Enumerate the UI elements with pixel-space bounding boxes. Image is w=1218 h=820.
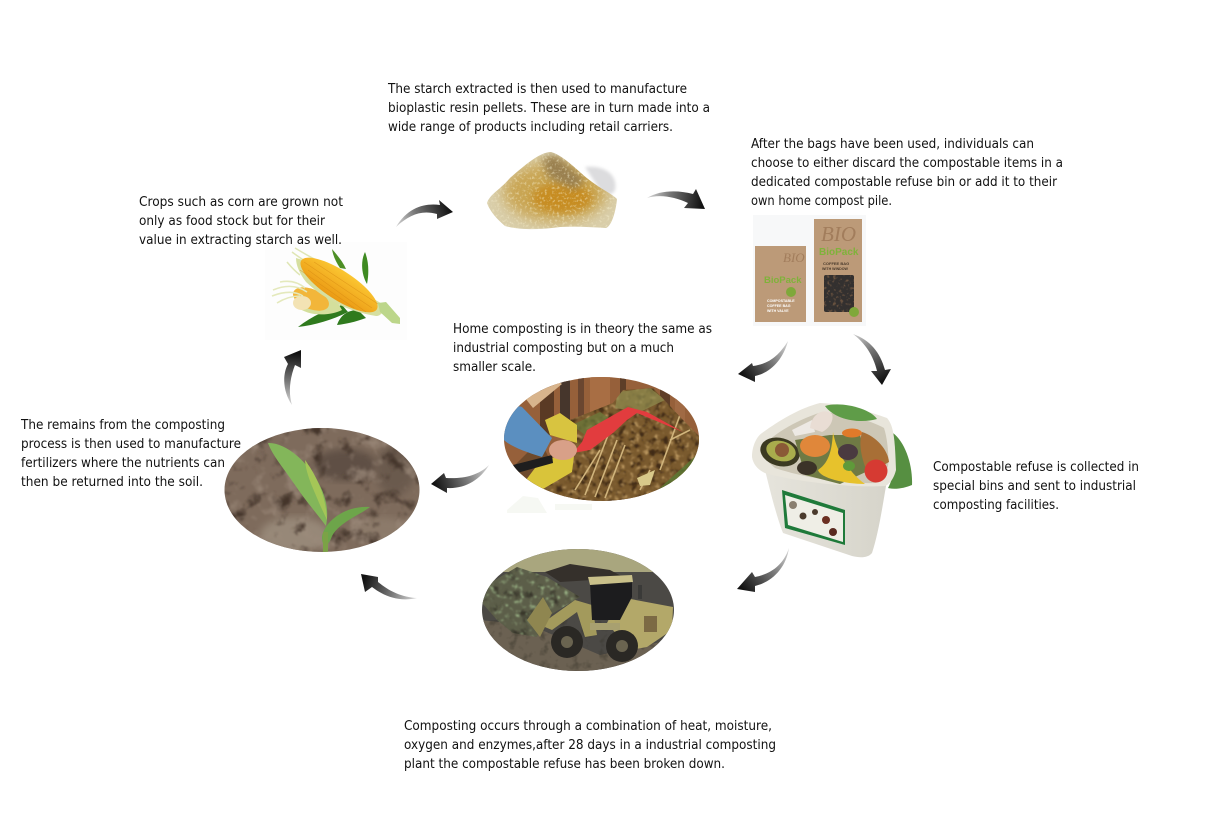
text: collection in bins: Compostable refuse is collected in xyxy=(933,460,1139,475)
arrow: corn to starch xyxy=(396,200,453,227)
text: after use of bags: own home compost pile. xyxy=(751,194,892,209)
image: compostable coffee bags xyxy=(753,215,866,326)
green top lid xyxy=(825,404,877,421)
text: collection in bins: special bins and sent to industrial xyxy=(933,479,1136,494)
bin body xyxy=(765,470,887,557)
text: fertilizers: then be returned into the soil. xyxy=(21,475,203,490)
green side lid xyxy=(888,433,912,489)
text: crops: only as food stock but for their xyxy=(139,214,326,229)
text: collection in bins: composting facilities. xyxy=(933,498,1059,513)
text: starch to pellets: The starch extracted is then used to manufacture xyxy=(387,82,687,97)
arrow: industrial composting to soil xyxy=(361,574,417,599)
text: after use of bags: dedicated compostable refuse bin or add it to their xyxy=(751,175,1058,190)
rim xyxy=(752,403,896,486)
text: crops xyxy=(139,195,343,248)
text: after use of bags: After the bags have been used, individuals can xyxy=(751,137,1034,152)
small kraft bag: WITH VALVE xyxy=(767,309,789,313)
text: industrial composting: oxygen and enzymes,after 28 days in a industrial composting xyxy=(404,738,776,753)
tall kraft bag: WITH WINDOW xyxy=(822,267,849,271)
small kraft bag: COFFEE BAG xyxy=(767,304,791,308)
compost pile xyxy=(541,388,699,501)
text: industrial composting: plant the compostable refuse has been broken down. xyxy=(404,757,725,772)
loader arm xyxy=(540,600,597,637)
loader body xyxy=(607,597,673,650)
decorative faint ghost shapes under home compost xyxy=(507,496,592,513)
image: starch resin pile xyxy=(487,152,617,230)
sprout xyxy=(268,443,370,552)
arrow: home composting to soil xyxy=(431,465,489,493)
text: fertilizers: The remains from the composting xyxy=(20,418,225,433)
small kraft bag: COMPOSTABLE xyxy=(767,299,795,303)
text: home composting xyxy=(453,322,712,375)
text: collection in bins xyxy=(933,460,1139,513)
hand xyxy=(549,440,577,460)
text: fertilizers xyxy=(20,418,241,490)
tall kraft bag: BIO xyxy=(821,222,856,246)
yellow leaves xyxy=(526,456,574,489)
text: fertilizers: fertilizers where the nutrients can xyxy=(21,456,225,471)
arrow: bags to collection bin xyxy=(853,334,891,385)
rear wheel xyxy=(606,630,638,662)
arrow: starch to bags xyxy=(647,189,705,209)
compost label xyxy=(782,490,845,545)
denim sleeve xyxy=(504,406,552,457)
arrow: soil to corn xyxy=(284,350,301,405)
text: industrial composting xyxy=(404,719,776,772)
text: crops: Crops such as corn are grown not xyxy=(139,195,343,210)
text: after use of bags: choose to either discard the compostable items in a xyxy=(751,156,1063,171)
arrow: bags to home composting xyxy=(738,341,788,382)
text: crops: value in extracting starch as well. xyxy=(139,233,342,248)
text: after use of bags xyxy=(751,137,1063,209)
text: starch to pellets xyxy=(387,82,710,135)
image: home compost heap xyxy=(504,377,699,501)
food scraps xyxy=(757,411,889,484)
text: industrial composting: Composting occurs through a combination of heat, moisture, xyxy=(404,719,772,734)
small kraft bag: BioPack xyxy=(764,275,802,286)
tall kraft bag: COFFEE BAG xyxy=(823,261,849,266)
black handle xyxy=(513,455,553,473)
text: home composting: industrial composting but on a much xyxy=(453,341,674,356)
compost heap xyxy=(482,567,580,637)
text: starch to pellets: wide range of products including retail carriers. xyxy=(388,120,673,135)
text: home composting: smaller scale. xyxy=(453,360,536,375)
loader bucket xyxy=(527,597,552,637)
image: wheel loader in compost yard xyxy=(480,545,676,675)
image: compost bin with food scraps xyxy=(752,403,912,557)
tall kraft bag xyxy=(814,219,862,322)
front wheel xyxy=(551,626,583,658)
image: seedling in soil xyxy=(222,425,422,555)
small kraft bag: BIO xyxy=(783,250,805,265)
red shovel xyxy=(573,407,683,453)
text: fertilizers: process is then used to manufacture xyxy=(21,437,241,452)
interior xyxy=(760,412,888,483)
image: corn cobs xyxy=(265,242,407,340)
text: starch to pellets: bioplastic resin pellets. These are in turn made into a xyxy=(388,101,710,116)
tall kraft bag: BioPack xyxy=(819,247,859,258)
cab xyxy=(590,581,632,620)
small kraft bag xyxy=(755,246,806,322)
arrow: bin to industrial composting xyxy=(737,548,789,592)
text: home composting: Home composting is in theory the same as xyxy=(453,322,712,337)
